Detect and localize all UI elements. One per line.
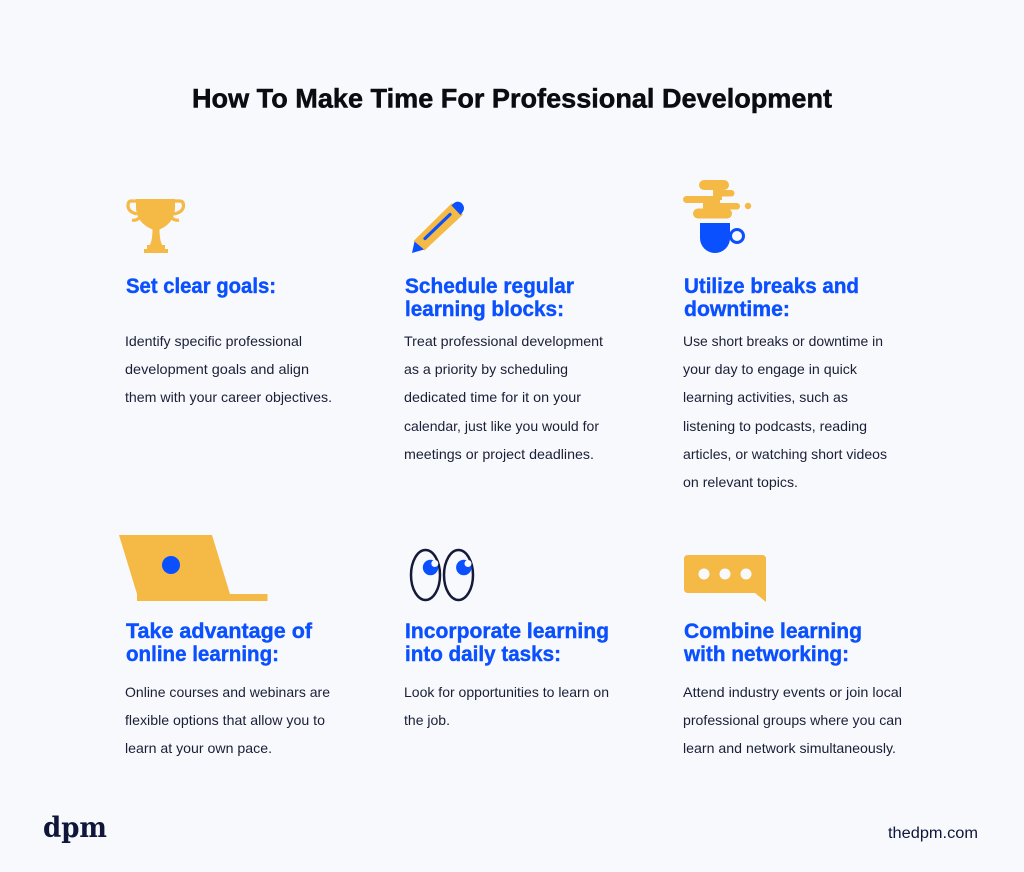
- text: utilize breaks and downtime: your day to engage in quick: [683, 361, 858, 377]
- text: schedule regular learning blocks: [404, 333, 603, 462]
- heading: schedule regular learning blocks: learning blocks:: [405, 297, 564, 321]
- text: set clear goals: Identify specific professional: [125, 333, 302, 349]
- text: combine learning with networking: professional groups where you can: [683, 712, 902, 728]
- heading: utilize breaks and downtime: Utilize breaks and: [684, 274, 859, 298]
- text: utilize breaks and downtime: articles, or watching short videos: [683, 446, 887, 462]
- text: take advantage of online learning: Online courses and webinars are: [125, 684, 330, 700]
- panel: utilize breaks and downtime: [683, 180, 887, 490]
- text: incorporate learning into daily tasks: Look for opportunities to learn on: [404, 684, 609, 700]
- heading: schedule regular learning blocks: [405, 274, 575, 321]
- heading: utilize breaks and downtime: downtime:: [684, 297, 790, 321]
- heading: schedule regular learning blocks: Schedule regular: [405, 274, 575, 298]
- panel: take advantage of online learning: [119, 535, 330, 756]
- heading: set clear goals: Set clear goals:: [126, 274, 276, 298]
- text: take advantage of online learning: learn at your own pace.: [125, 740, 272, 756]
- icon: pencil: [412, 202, 464, 253]
- panel: combine learning with networking: [683, 555, 902, 756]
- icon: eyes: [411, 550, 473, 600]
- heading: utilize breaks and downtime: [684, 274, 859, 321]
- text: take advantage of online learning: [125, 684, 330, 756]
- heading: incorporate learning into daily tasks: into daily tasks:: [405, 642, 561, 666]
- panel: schedule regular learning blocks: [404, 202, 603, 462]
- icon: coffee cup with steam: [683, 180, 751, 253]
- heading: combine learning with networking: with networking:: [683, 642, 849, 666]
- text: schedule regular learning blocks: calendar, just like you would for: [404, 418, 599, 434]
- text: set clear goals: them with your career objectives.: [125, 389, 332, 405]
- text: schedule regular learning blocks: Treat professional development: [404, 333, 603, 349]
- heading: take advantage of online learning: [126, 619, 313, 666]
- text: incorporate learning into daily tasks: [404, 684, 609, 728]
- text: utilize breaks and downtime: on relevant topics.: [683, 474, 798, 490]
- text: combine learning with networking: [683, 684, 902, 756]
- heading: incorporate learning into daily tasks: Incorporate learning: [405, 619, 609, 643]
- icon: laptop: [119, 535, 268, 601]
- panel: set clear goals: [125, 199, 332, 405]
- text: schedule regular learning blocks: dedicated time for it on your: [404, 389, 581, 405]
- panel: incorporate learning into daily tasks: [404, 550, 609, 728]
- text: schedule regular learning blocks: as a priority by scheduling: [404, 361, 568, 377]
- title: How To Make Time For Professional Development: [192, 84, 832, 114]
- icon: speech bubble: [684, 555, 766, 602]
- text: set clear goals: development goals and align: [125, 361, 309, 377]
- heading: take advantage of online learning: online learning:: [126, 642, 279, 666]
- footer url: thedpm.com: [888, 825, 978, 842]
- text: utilize breaks and downtime: [683, 333, 887, 490]
- text: take advantage of online learning: flexible options that allow you to: [125, 712, 325, 728]
- text: set clear goals: [125, 333, 332, 405]
- heading: combine learning with networking: Combine learning: [684, 619, 862, 643]
- text: utilize breaks and downtime: listening to podcasts, reading: [683, 418, 867, 434]
- heading: combine learning with networking: [683, 619, 862, 666]
- text: schedule regular learning blocks: meetings or project deadlines.: [404, 446, 594, 462]
- logo: dpm: dpm: [43, 811, 107, 844]
- heading: incorporate learning into daily tasks: [405, 619, 609, 666]
- heading: take advantage of online learning: Take advantage of: [126, 619, 313, 643]
- text: utilize breaks and downtime: learning activities, such as: [683, 389, 848, 405]
- text: utilize breaks and downtime: Use short breaks or downtime in: [683, 333, 883, 349]
- text: combine learning with networking: Attend industry events or join local: [683, 684, 902, 700]
- icon: trophy: [128, 199, 184, 253]
- text: incorporate learning into daily tasks: the job.: [404, 712, 450, 728]
- text: combine learning with networking: learn and network simultaneously.: [683, 740, 896, 756]
